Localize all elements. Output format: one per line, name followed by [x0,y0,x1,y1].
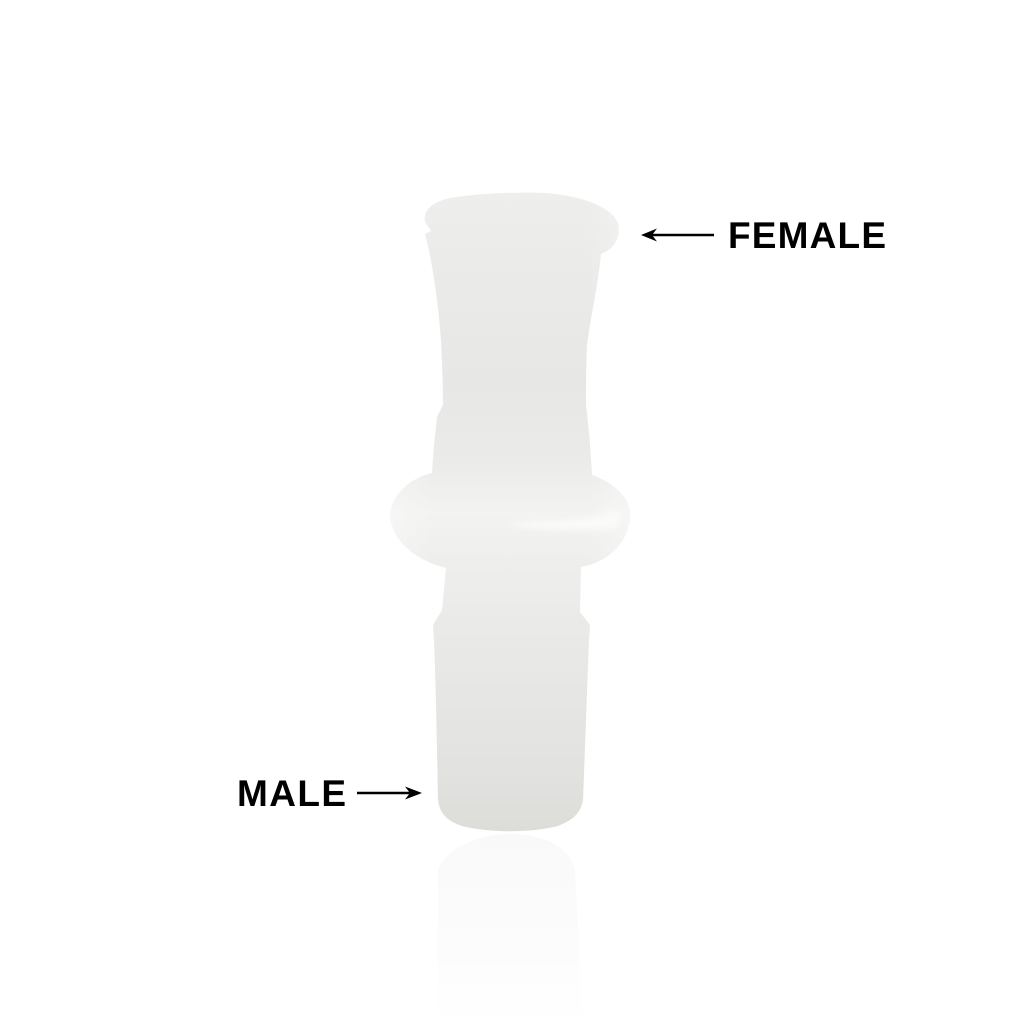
adapter body [390,193,630,831]
label: male: MALE [237,773,346,814]
ring highlight [505,510,620,530]
arrow: female [641,228,714,242]
reflection of adapter [438,834,583,1024]
label: female: FEMALE [728,215,886,256]
arrow: male [357,786,422,800]
